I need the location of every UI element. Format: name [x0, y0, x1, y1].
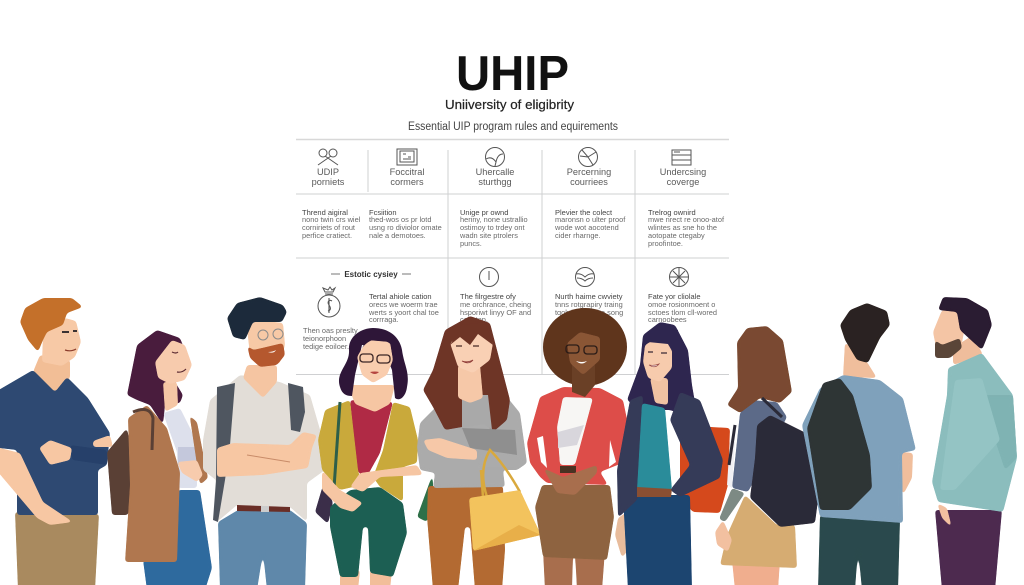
body text cell 1: corniriets of rout	[302, 223, 355, 232]
body text row 2 column 4	[555, 292, 623, 317]
body text cell 2	[369, 208, 442, 240]
column 1 header: UDIP	[317, 167, 339, 177]
icon: money bag	[318, 287, 340, 317]
person 3: man with beard and glasses	[203, 297, 325, 585]
icon: exclamation circle	[480, 268, 498, 286]
body text cell 4: cider rharnge.	[555, 231, 601, 240]
body text cell 3: heriny, none ustrallio	[460, 215, 528, 224]
body text cell 5: proofintoe.	[648, 239, 683, 248]
body text row 2 left: werts s yoort chal toe	[368, 308, 439, 317]
body text row 2 column 3: hsporiwt linyy OF and	[460, 308, 531, 317]
body text row 2 column 3	[460, 292, 531, 324]
body text cell 5: mwe nrect re onoo-atof	[648, 215, 725, 224]
body text cell 3: puncs.	[460, 239, 482, 248]
body text row 2 column 5: carnoobees	[648, 315, 687, 324]
column 4 header: Percerning	[567, 167, 611, 177]
body text cell 2: Fcsiition	[369, 208, 397, 217]
body text row 2 left: Tertal ahiole cation	[369, 292, 432, 301]
body text row 2 left: orecs we woerm trae	[369, 300, 438, 309]
body text row 2 left	[368, 292, 439, 324]
body text cell 5: wlintes as sne ho the	[647, 223, 717, 232]
column 1 header: porniets	[312, 177, 345, 187]
body text cell 3	[459, 208, 528, 248]
body text row 2 column 4: tqolve onhe sta song	[555, 308, 623, 317]
column 3 header: Uhercalle	[476, 167, 514, 177]
icon: open book	[576, 268, 594, 286]
body text cell 3: Unige pr ownd	[460, 208, 508, 217]
person 1: man in navy polo	[0, 298, 113, 585]
person 9: man from behind with backpack	[802, 303, 916, 585]
person 6: woman with afro in red cardigan	[527, 308, 635, 585]
body text row 2 column 3: cosetop.	[460, 315, 488, 324]
body text row 2 left: corrraga.	[369, 315, 399, 324]
body text row 2 column 5: omoe rosionmoent o	[648, 300, 715, 309]
column 2 header	[390, 149, 424, 187]
body text row 2 lower left: Then oas preslty	[303, 326, 358, 335]
body text row 2 column 5	[648, 292, 717, 324]
person 8: woman from behind with backpack	[715, 326, 820, 585]
tagline: Essential UIP program rules and equirements	[408, 121, 618, 133]
body text row 2 lower left: teionorphoon	[303, 334, 346, 343]
body text cell 4: Plevier the colect	[555, 208, 613, 217]
body text cell 2: thed-wos os pr lotd	[369, 215, 431, 224]
second row heading: Estotic cysiey	[344, 270, 398, 279]
body text cell 1: perfice cratiect.	[302, 231, 352, 240]
column 5 header: covergе	[667, 177, 699, 187]
body text row 2 column 4: tnns rotgrapiry traing	[555, 300, 623, 309]
column 5 header: Undercsing	[660, 167, 706, 177]
icon: wheel	[670, 268, 688, 286]
body text row 2 column 3: me orchrance, cheing	[460, 300, 531, 309]
body text cell 2: nale a demotoes.	[369, 231, 426, 240]
body text cell 1	[302, 208, 361, 240]
title: UHIP	[456, 47, 569, 101]
body text row 2 lower left: tedige eoiloer.	[303, 342, 349, 351]
eligibility rules table	[296, 140, 729, 374]
body text cell 5	[647, 208, 725, 248]
table grid	[296, 140, 729, 374]
person 10: man in side profile in teal shirt	[932, 297, 1017, 585]
body text cell 4: maronsn o ulter proof	[555, 215, 626, 224]
body text cell 4	[554, 208, 626, 240]
column 5 header	[660, 150, 706, 187]
person 2: woman in brown jacket	[107, 330, 212, 585]
body text cell 2: usng ro diviolor omate	[369, 223, 442, 232]
person 7: woman with long hair and orange bag	[615, 322, 730, 585]
column 4 header	[567, 148, 611, 187]
body text cell 5: aotopate ctegaby	[648, 231, 705, 240]
subtitle: Uniiversity of eligibrity	[445, 97, 575, 112]
body text row 2 lower left	[303, 326, 358, 351]
body text cell 3: ostimoy to trdey ont	[460, 223, 524, 232]
person 5: woman in grey sweater with yellow bag	[417, 316, 541, 585]
body text cell 5: Trelrog ownird	[648, 208, 696, 217]
column 3 header	[476, 148, 514, 187]
body text row 2 column 5: Fate yor cliolale	[648, 292, 701, 301]
body text row 2 column 4: Nurth haime cwviety	[555, 292, 623, 301]
body text cell 4: wode wot aocotend	[554, 223, 619, 232]
column 4 header: courriees	[570, 177, 608, 187]
person 4: woman in yellow cardigan	[315, 328, 423, 585]
group of students	[0, 297, 1017, 585]
body text cell 3: wadn site ptrolers	[459, 231, 518, 240]
column 1 header	[312, 149, 345, 187]
column 2 header: Foccitral	[390, 167, 424, 177]
body text cell 1: Thrend aigiral	[302, 208, 348, 217]
body text row 2 column 3: The filrgestre ofy	[460, 292, 516, 301]
column 3 header: sturthgg	[478, 177, 512, 187]
column 2 header: cormers	[390, 177, 424, 187]
body text cell 1: nono twin crs wiel	[302, 215, 361, 224]
second row heading	[331, 270, 411, 279]
body text row 2 column 5: sctoes tlom cll-wored	[648, 308, 717, 317]
